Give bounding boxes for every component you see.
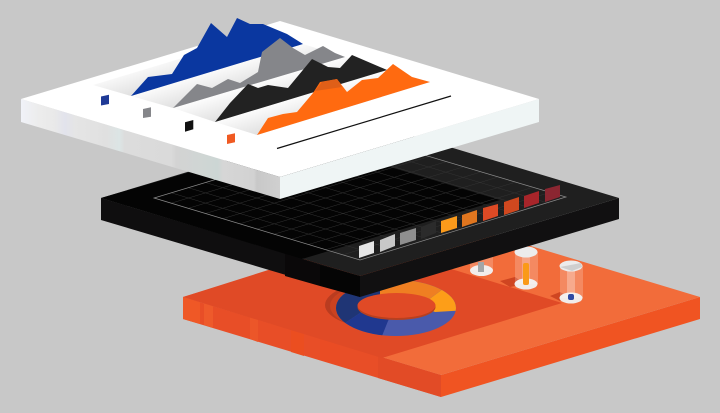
legend: grey — [143, 107, 151, 118]
legend: orange — [227, 133, 235, 144]
cylinder: blue — [550, 260, 583, 304]
white slab — [21, 18, 539, 199]
orange slab — [183, 219, 700, 397]
axis line — [277, 96, 451, 148]
bar row — [359, 185, 560, 258]
area chart: grey — [173, 38, 345, 108]
chart backing bands — [93, 33, 430, 135]
area chart: black — [215, 55, 387, 122]
cylinder: orange — [500, 246, 538, 290]
area chart: blue — [131, 18, 303, 96]
grid — [154, 136, 566, 260]
legend: blue — [101, 95, 109, 106]
area chart: orange — [257, 64, 430, 135]
overlap shade — [315, 79, 342, 91]
donut chart — [325, 281, 456, 336]
black slab — [101, 120, 619, 297]
cylinder: grey — [470, 240, 493, 276]
legend: black — [185, 120, 193, 132]
